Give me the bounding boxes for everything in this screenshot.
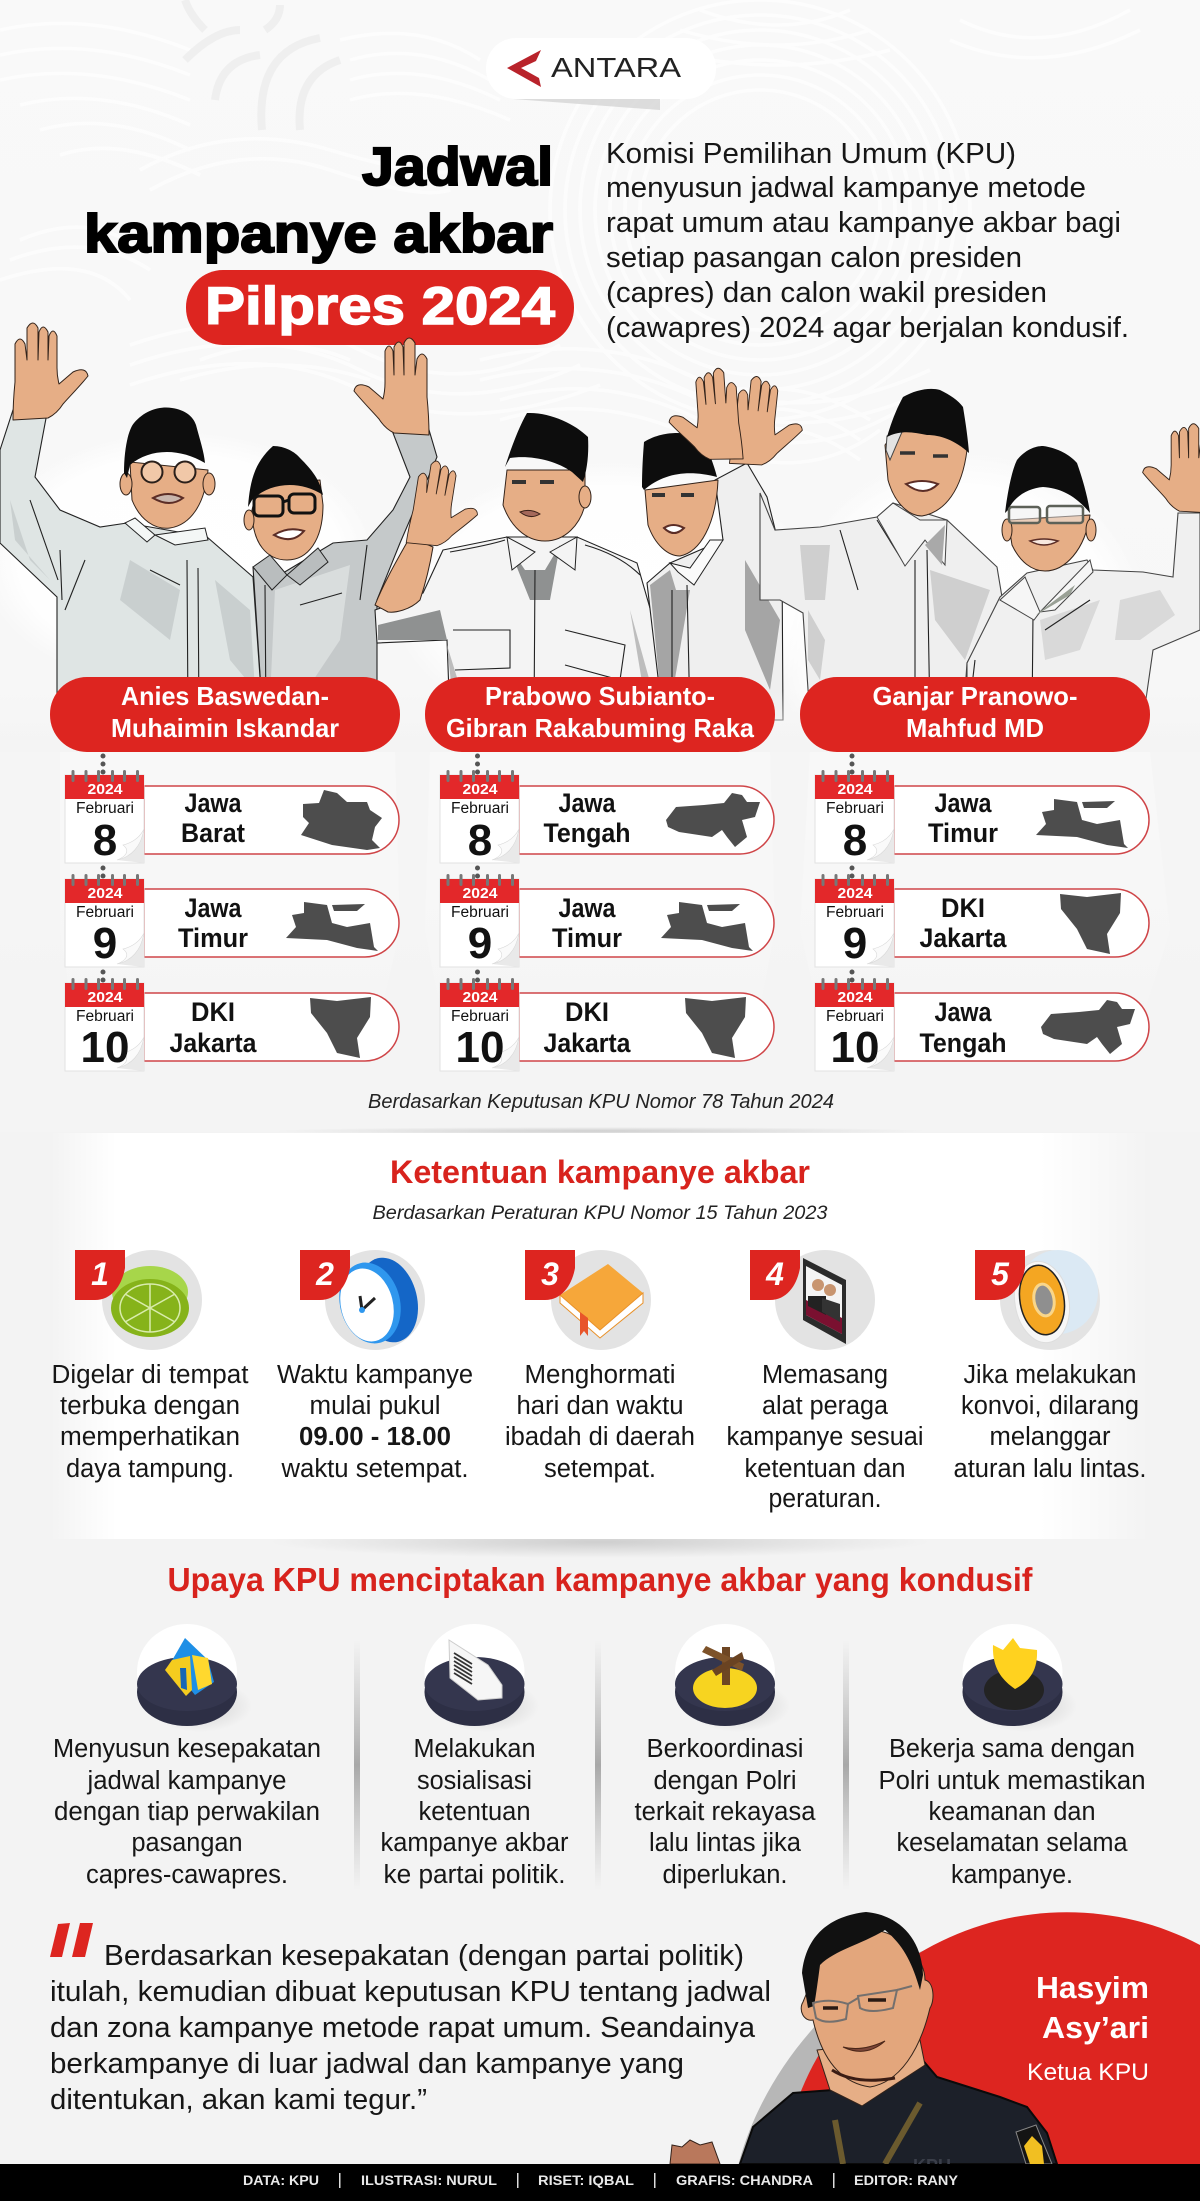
portrait [670,1912,1057,2176]
row: 10 Februari Jawa Tengah: 10 [831,1023,879,1072]
panel: Ganjar Pranowo - Mahfud MD schedule [800,677,1150,1072]
row: 8 Februari Jawa Timur: 2024 [838,781,873,798]
icon: book [551,1250,651,1350]
row: 8 Februari Jawa Barat: Jawa [184,788,242,818]
ghost bodies behind schedule [0,690,1200,1132]
intro text: (cawapres) 2024 agar berjalan kondusif. [606,312,1129,344]
row: 9 Februari Jawa Timur [65,874,399,968]
rule 4 text: alat peraga [762,1392,889,1420]
row: 8 Februari Jawa Barat: Barat [181,818,245,848]
rule 1 [52,1250,248,1483]
effort 4 text: Bekerja sama dengan [889,1735,1135,1763]
rule 2 text: 09.00 - 18.00 [299,1423,451,1451]
effort 1 text: pasangan [132,1829,242,1857]
row: 9 Februari Jawa Timur: Timur [178,923,248,953]
row: 8 Februari Jawa Tengah [440,770,774,865]
row: 8 Februari Jawa Timur: 8 [843,816,867,865]
rule 5 text: aturan lalu lintas. [954,1455,1146,1483]
badge 3: 3 [541,1256,559,1292]
row: 10 Februari DKI Jakarta: Februari [76,1008,134,1025]
name: Hasyim [1036,1970,1149,2005]
badge 4: 4 [765,1256,784,1292]
effort 3 text: diperlukan. [662,1861,788,1889]
row: 10 Februari Jawa Tengah: Februari [826,1008,884,1025]
icon: loudspeaker [1000,1250,1100,1350]
row: 8 Februari Jawa Timur [815,770,1149,865]
row: 8 Februari Jawa Timur: Februari [826,800,884,817]
effort 3 text: dengan Polri [654,1767,796,1795]
badge 5: 5 [991,1256,1010,1292]
effort 3 text: lalu lintas jika [649,1829,802,1857]
row: 10 Februari Jawa Tengah: 2024 [838,989,873,1006]
rule 5 text [954,1361,1146,1483]
candidate pill: Ganjar Pranowo- [872,681,1078,711]
quote text: Berdasarkan kesepakatan (dengan partai politik) [104,1940,744,1972]
portrait: KPU [913,2156,951,2176]
candidate pill: Muhaimin Iskandar [111,713,339,743]
row: 10 Februari DKI Jakarta: Jakarta [170,1028,257,1058]
row: 10 Februari Jawa Tengah: Jawa [934,997,992,1027]
rule 4 [726,1250,924,1513]
badge 4 [750,1250,800,1300]
row: 10 Februari DKI Jakarta [440,978,774,1072]
candidate pill: Gibran Rakabuming Raka [446,713,755,743]
row: 8 Februari Jawa Timur: Jawa [934,788,992,818]
effort 1 text: Menyusun kesepakatan [53,1735,321,1763]
row: 8 Februari Jawa Tengah: 8 [468,816,492,865]
row: 9 Februari DKI Jakarta: 9 [843,919,867,968]
row: 10 Februari DKI Jakarta: 2024 [462,989,498,1006]
candidate pill [800,677,1150,752]
badge 1: 1 [91,1256,109,1292]
effort 4 text [878,1735,1146,1889]
effort 4 text: keselamatan selama [896,1829,1128,1857]
intro text [606,138,1129,344]
row: 10 Februari DKI Jakarta: 10 [81,1023,129,1072]
row: 9 Februari DKI Jakarta: Jakarta [920,923,1007,953]
rule 2 text: Waktu kampanye [277,1361,473,1389]
rule 2 text: waktu setempat. [280,1455,468,1483]
row: 8 Februari Jawa Tengah: 2024 [462,781,498,798]
effort 3 text [634,1735,816,1889]
intro text: setiap pasangan calon presiden [606,242,1022,274]
icon: open-air venue [102,1250,202,1350]
row: 9 Februari Jawa Timur: Februari [76,904,134,921]
panel: Upaya KPU [53,1561,1146,1890]
candidate pill: Mahfud MD [906,713,1044,743]
candidate pill: Prabowo Subianto- [485,681,715,711]
row: 9 Februari Jawa Timur: 9 [93,919,117,968]
rule 3 text [505,1361,695,1483]
effort 1 text: capres-cawapres. [86,1861,288,1889]
row: 8 Februari Jawa Barat: 2024 [88,781,123,798]
badge: Pilpres 2024: Pilpres 2024 [205,277,556,336]
intro text: Komisi Pemilihan Umum (KPU) [606,138,1016,170]
rule 3 text: Menghormati [524,1361,676,1389]
badge 2 [300,1250,350,1300]
figure: Ganjar Pranowo [760,389,1002,720]
panel: Hasyim Asy'ari [670,1912,1200,2176]
title: Jadwal [362,137,553,197]
figure: Prabowo Subianto [375,413,663,720]
row: 10 Februari DKI Jakarta [65,978,399,1072]
row: 10 Februari Jawa Tengah [815,978,1149,1072]
effort 1 [53,1624,321,1889]
candidate pill: Anies Baswedan- [121,681,329,711]
icon: clock [325,1250,427,1350]
panel: Anies Baswedan - Muhaimin Iskandar schedule [50,677,400,1072]
rule 5 text: konvoi, dilarang [961,1392,1139,1420]
panel: Ketentuan kampanye akbar [50,1127,1150,1558]
icon: agreement folders on disc [137,1624,252,1732]
row: 8 Februari Jawa Barat [65,770,399,865]
row: 9 Februari DKI Jakarta: 2024 [838,885,873,902]
candidate pill [50,677,400,752]
row: 9 Februari Jawa Timur: 2024 [88,885,123,902]
effort 1 text: jadwal kampanye [86,1767,286,1795]
source note: Keputusan KPU: Berdasarkan Keputusan KPU Nomor 78 Tahun 2024 [368,1091,834,1113]
row: 10 Februari DKI Jakarta: Februari [451,1008,509,1025]
illustration: candidates [0,323,1200,1132]
effort 2 text: ketentuan [418,1798,530,1826]
row: 8 Februari Jawa Timur: Timur [928,818,998,848]
name: Asy’ari [1042,2010,1149,2045]
icon: shield on disc [962,1624,1077,1732]
badge 1 [75,1250,125,1300]
title: kampanye akbar [84,204,553,264]
figure: Anies Baswedan [0,323,263,720]
candidate pill [425,677,775,752]
heading: Ketentuan kampanye akbar [390,1154,810,1190]
quote text: itulah, kemudian dibuat keputusan KPU tentang jadwal [50,1976,771,2008]
intro text: menyusun jadwal kampanye metode [606,172,1086,204]
rule 5 text: melanggar [990,1423,1111,1451]
rule 3 [505,1250,695,1483]
effort 2 text: kampanye akbar [380,1829,569,1857]
effort 2 text: sosialisasi [417,1767,532,1795]
row: 8 Februari Jawa Barat: Februari [76,800,134,817]
figure: Gibran Rakabuming Raka [642,367,807,720]
row: 8 Februari Jawa Tengah: Jawa [558,788,616,818]
rule 4 text: kampanye sesuai [726,1423,924,1451]
effort 2 text: Melakukan [414,1735,536,1763]
heading: Upaya KPU menciptakan kampanye akbar yang kondusif [168,1561,1033,1598]
panel: Prabowo Subianto - Gibran Rakabuming Raka schedule [425,677,775,1072]
effort 4 text: keamanan dan [928,1798,1096,1826]
row: 9 Februari Jawa Timur: Februari [451,904,509,921]
icon: document stack on disc [424,1624,539,1732]
badge 5 [975,1250,1025,1300]
logo: ANTARA: ANTARA [551,52,681,83]
intro text: (capres) dan calon wakil presiden [606,277,1047,309]
row: 10 Februari DKI Jakarta: 10 [456,1023,504,1072]
footer credits [0,2164,1200,2201]
rule 1 text: daya tampung. [66,1455,234,1483]
quote text: dan zona kampanye metode rapat umum. Seandainya [50,2012,756,2044]
row: 8 Februari Jawa Tengah: Februari [451,800,509,817]
rule 5 [954,1250,1146,1483]
badge 2: 2 [315,1256,334,1292]
row: 10 Februari DKI Jakarta: DKI [191,997,235,1027]
name: Ketua KPU [1027,2059,1149,2086]
row: 9 Februari Jawa Timur: Jawa [558,893,616,923]
row: 8 Februari Jawa Tengah: Tengah [544,818,630,848]
effort 3 text: Berkoordinasi [646,1735,804,1763]
row: 8 Februari Jawa Barat: 8 [93,816,117,865]
quote text: ditentukan, akan kami tegur.” [50,2084,427,2116]
figure: Mahfud MD [967,424,1200,720]
rule 3 text: setempat. [544,1455,656,1483]
footer credits: DATA: KPU [243,2173,319,2188]
row: 10 Februari DKI Jakarta: 2024 [88,989,123,1006]
row: 9 Februari Jawa Timur: 2024 [462,885,498,902]
row: 9 Februari DKI Jakarta: Februari [826,904,884,921]
rule 3 text: hari dan waktu [516,1392,684,1420]
name [1027,1970,1149,2086]
footer credits: RISET: IQBAL [538,2173,634,2188]
effort 1 text [53,1735,321,1889]
row: 9 Februari Jawa Timur: Jawa [184,893,242,923]
rule 2 text [277,1361,473,1483]
rule 4 text [726,1361,924,1513]
rule 2 text: mulai pukul [310,1392,440,1420]
rule 3 text: ibadah di daerah [505,1423,695,1451]
row: 9 Februari Jawa Timur [440,874,774,968]
quote [50,1923,771,2116]
effort 2 text [380,1735,569,1889]
quote text [50,1940,771,2116]
rule 1 text: terbuka dengan [60,1392,240,1420]
row: 10 Februari Jawa Tengah: Tengah [920,1028,1006,1058]
row: 10 Februari DKI Jakarta: DKI [565,997,609,1027]
intro text: rapat umum atau kampanye akbar bagi [606,207,1121,239]
footer credits: GRAFIS: CHANDRA [676,2173,813,2188]
effort 2 [380,1624,569,1889]
effort 2 text: ke partai politik. [384,1861,566,1889]
effort 4 text: kampanye. [951,1861,1073,1889]
footer credits: ILUSTRASI: NURUL [361,2173,497,2188]
quote text: berkampanye di luar jadwal dan kampanye yang [50,2048,684,2080]
row: 9 Februari Jawa Timur: Timur [552,923,622,953]
rule 1 text: memperhatikan [60,1423,240,1451]
rule 4 text: ketentuan dan [744,1455,906,1483]
icon: campaign poster [775,1250,875,1350]
figure: Muhaimin Iskandar [244,338,437,720]
rule 4 text: peraturan. [768,1485,882,1513]
effort 4 [878,1624,1146,1889]
effort 3 [634,1624,816,1889]
row: 10 Februari DKI Jakarta: Jakarta [544,1028,631,1058]
logo: ANTARA [486,38,716,110]
badge 3 [525,1250,575,1300]
row: 9 Februari DKI Jakarta [815,874,1149,968]
title [84,137,574,345]
rule 5 text: Jika melakukan [964,1361,1136,1389]
effort 4 text: Polri untuk memastikan [878,1767,1146,1795]
icon: quote mark [50,1923,93,1957]
effort 3 text: terkait rekayasa [634,1798,816,1826]
footer credits: EDITOR: RANY [854,2173,958,2188]
subheading: Berdasarkan Peraturan KPU Nomor 15 Tahun 2023 [372,1203,828,1224]
rule 4 text: Memasang [762,1361,888,1389]
rule 1 text [52,1361,248,1483]
rule 2 [277,1250,473,1483]
row: 9 Februari DKI Jakarta: DKI [941,893,985,923]
rule 1 text: Digelar di tempat [52,1361,248,1389]
badge: Pilpres 2024 [186,270,574,345]
effort 1 text: dengan tiap perwakilan [54,1798,320,1826]
icon: road barrier on disc [675,1624,790,1732]
row: 9 Februari Jawa Timur: 9 [468,919,492,968]
